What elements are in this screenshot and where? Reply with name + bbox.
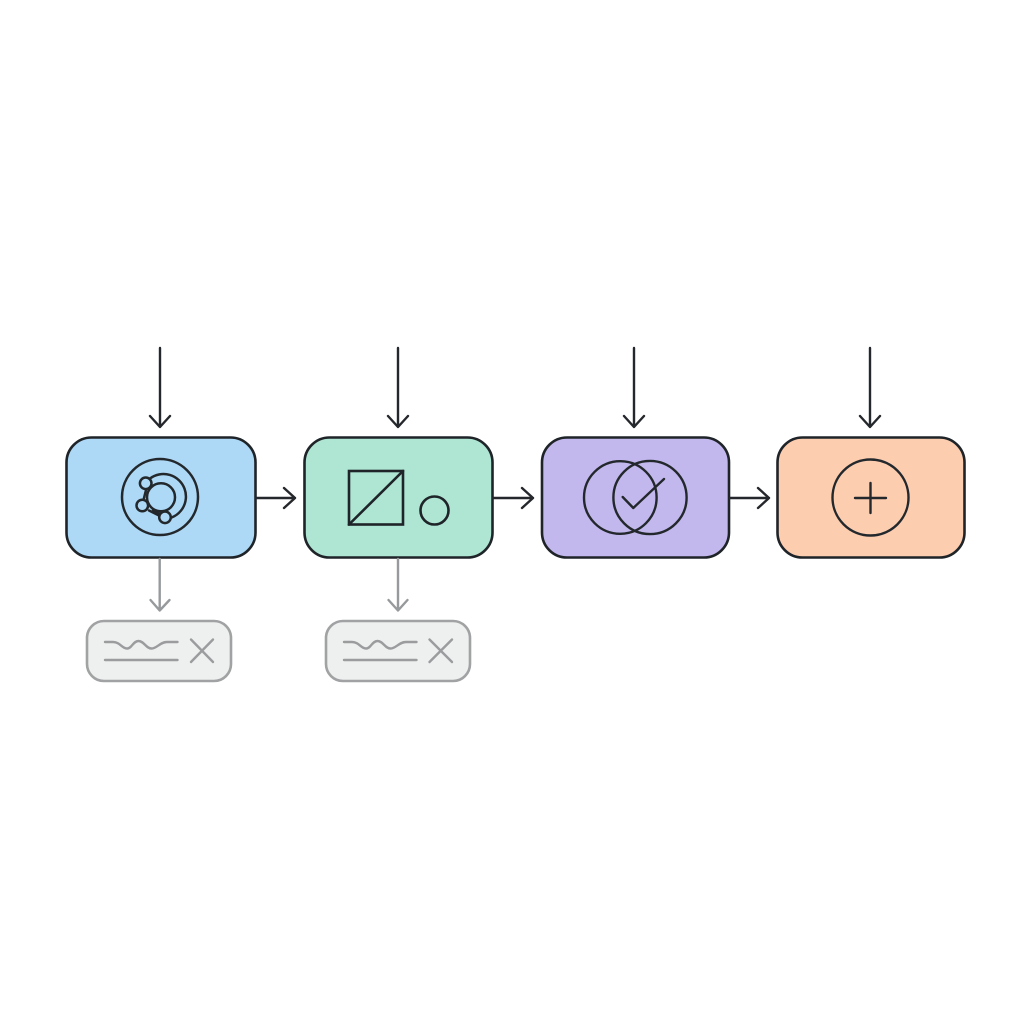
- icon: split square and circle: [349, 471, 448, 524]
- connector arrow 3: [730, 488, 769, 508]
- input arrow 4: [860, 348, 880, 427]
- icon: overlapping circles with check: [584, 461, 687, 534]
- icon: wavy line, line and cross: [344, 640, 452, 662]
- reject arrow 2: [388, 559, 408, 610]
- panel: reject box 2: [326, 621, 470, 681]
- connector arrow 1: [256, 488, 295, 508]
- reject arrow 1: [150, 559, 170, 610]
- input arrow 1: [150, 348, 170, 427]
- icon: ring with nodes: [122, 459, 198, 535]
- icon: wavy line, line and cross: [105, 640, 213, 662]
- icon: circled plus: [832, 460, 908, 536]
- panel: blue step: [66, 438, 256, 558]
- input arrow 3: [624, 348, 644, 427]
- connector arrow 2: [493, 488, 533, 508]
- panel: green step: [304, 438, 492, 558]
- panel: reject box 1: [87, 621, 231, 681]
- panel: orange step: [778, 438, 964, 558]
- panel: purple step: [542, 438, 729, 558]
- input arrow 2: [388, 348, 408, 427]
